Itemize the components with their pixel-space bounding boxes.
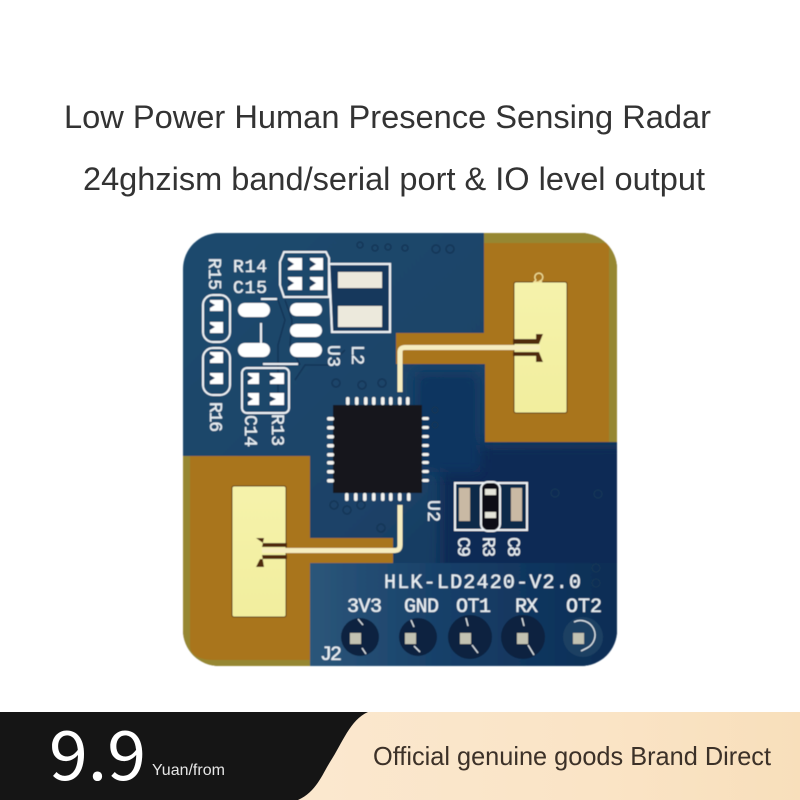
silkscreen labels: J2 <box>320 644 342 667</box>
silkscreen labels: OT1 <box>456 596 491 619</box>
radar chip <box>327 397 429 501</box>
radar module board <box>183 233 640 675</box>
silkscreen labels: U2 <box>422 500 442 522</box>
copper area: bottom left antenna ground <box>183 456 393 666</box>
silkscreen labels: R15 <box>203 258 223 290</box>
silkscreen outlines and pads <box>203 252 527 531</box>
capacitor group C9 R3 C8 <box>455 482 527 531</box>
header pin holes <box>341 615 603 659</box>
silkscreen labels: C9 <box>452 537 472 557</box>
title line 2: 24ghzism band/serial port & IO level output <box>83 161 705 197</box>
traces and vias <box>278 242 602 587</box>
board edge tint <box>183 233 617 666</box>
banner: cream section <box>290 712 800 800</box>
silkscreen labels: R3 <box>477 537 497 557</box>
silkscreen labels: HLK-LD2420-V2.0 <box>384 572 581 595</box>
banner: black price section <box>0 712 368 800</box>
silkscreen labels: 3V3 <box>347 596 382 619</box>
price: 9.9 <box>49 701 146 800</box>
price unit: Yuan/from <box>152 762 225 779</box>
silkscreen labels: R14 <box>233 258 267 278</box>
silkscreen labels: R16 <box>204 402 224 432</box>
chip pins <box>327 397 429 501</box>
silkscreen labels: L2 <box>346 345 366 365</box>
silkscreen labels: R13 <box>266 414 286 446</box>
silkscreen labels: RX <box>515 596 538 619</box>
bottom banner <box>0 701 800 800</box>
board substrate <box>183 233 617 666</box>
silkscreen labels: C8 <box>502 537 522 557</box>
silkscreen labels: U3 <box>322 345 342 367</box>
antenna patch: top right <box>513 273 567 413</box>
lighter blue bottom area <box>310 563 617 666</box>
inductor L2 outline <box>329 264 390 332</box>
silkscreen labels: C14 <box>239 415 259 447</box>
silkscreen labels: C15 <box>233 279 267 299</box>
dark lower right blue area <box>440 445 640 675</box>
slogan: Official genuine goods Brand Direct <box>373 741 772 771</box>
feed line: top right <box>400 348 540 392</box>
copper area: top right antenna ground <box>396 233 617 442</box>
silkscreen labels <box>203 258 602 667</box>
silkscreen labels: GND <box>404 596 439 619</box>
dark shadow near chip <box>415 372 480 472</box>
antenna patch: bottom left <box>232 486 287 617</box>
silkscreen labels: OT2 <box>566 596 602 619</box>
title line 1: Low Power Human Presence Sensing Radar <box>64 99 711 135</box>
feed line: bottom left <box>262 505 400 550</box>
